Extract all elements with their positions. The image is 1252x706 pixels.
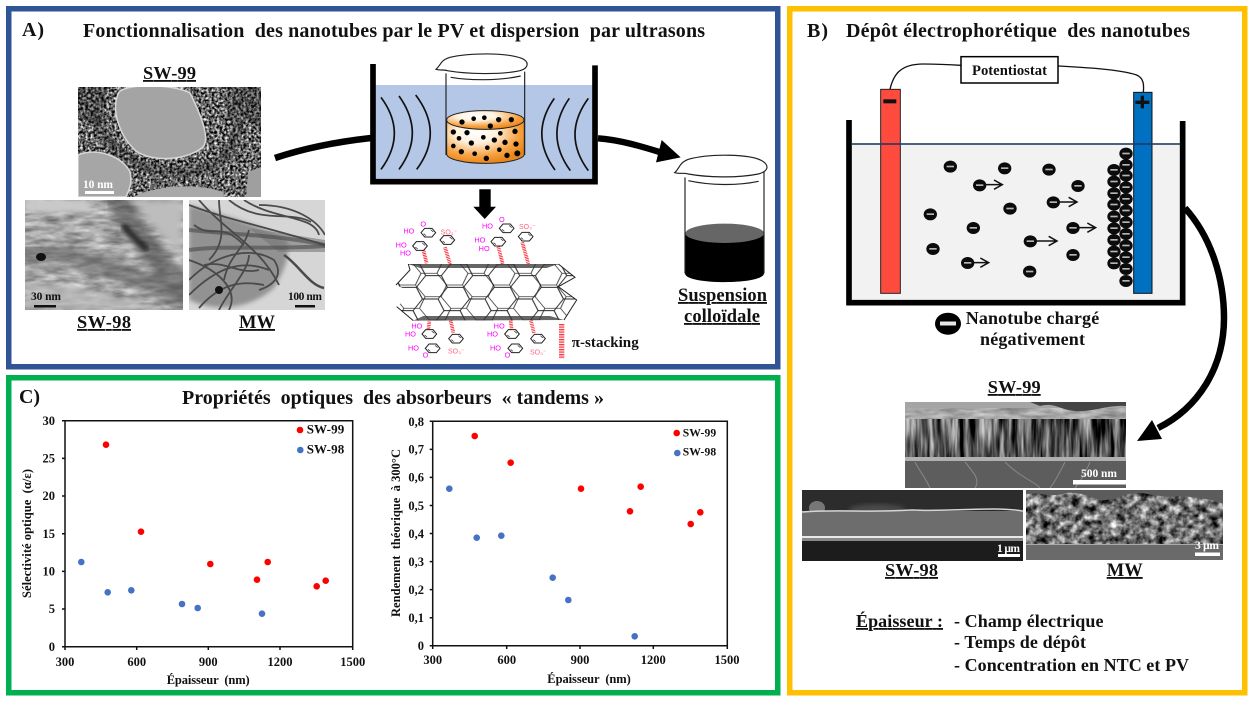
beaker with colloidal suspension — [675, 155, 767, 282]
panel B letter: B) — [807, 20, 828, 42]
anode — [1134, 92, 1152, 293]
cathode — [881, 89, 900, 293]
y axis tick labels: 0 — [418, 639, 424, 653]
legend: SW-98 — [683, 446, 716, 458]
y axis title: Rendement théorique à 300°C — [389, 449, 403, 617]
panel B: dépôt électrophorétique — [790, 9, 1245, 693]
panel B title: Dépôt électrophorétique des nanotubes — [846, 20, 1190, 42]
y axis tick labels — [42, 414, 55, 654]
x axis tick labels — [56, 655, 365, 669]
label suspension colloidale: colloïdale — [684, 307, 760, 327]
label SW-98: SW-98 — [77, 312, 131, 332]
legend: charged nanotube — [935, 308, 1099, 349]
PV molecule bottom left: O — [423, 350, 429, 359]
x axis tick labels: 900 — [199, 655, 218, 669]
y axis tick labels: 0,4 — [408, 527, 425, 541]
label SW-98 SEM: SW-98 — [885, 560, 938, 580]
PV molecule bottom left: SO₃⁻ — [448, 349, 465, 356]
PV molecule bottom right — [487, 322, 547, 359]
y axis tick labels: 0 — [49, 640, 55, 654]
TEM image SW-98 — [25, 200, 183, 310]
thickness parameters: - Champ électrique — [954, 611, 1104, 631]
wires — [890, 64, 1144, 92]
ultrasonic bath with beaker — [373, 54, 595, 182]
y axis tick labels: 20 — [42, 489, 55, 503]
panel C letter: C) — [19, 386, 40, 408]
PV molecule top left: SO₃⁻ — [441, 230, 458, 237]
SW-99 points — [103, 441, 329, 590]
PV molecule bottom right: O — [505, 350, 511, 359]
scale 3 µm: 3 µm — [1195, 540, 1219, 552]
scale 1 µm: 1 µm — [997, 543, 1020, 555]
curved arrow to SEM images — [1137, 208, 1224, 441]
migrating nanotubes with arrows — [961, 179, 1096, 269]
PV molecule bottom left: HO — [411, 322, 423, 331]
x axis title: Épaisseur (nm) — [547, 672, 631, 686]
y axis tick labels: 0,7 — [408, 442, 424, 456]
potentiostat box: Potentiostat — [972, 63, 1047, 79]
legend — [673, 426, 716, 458]
label SW-99 SEM: SW-99 — [988, 377, 1041, 397]
x axis tick labels — [423, 653, 740, 667]
legend: SW-98 — [307, 442, 345, 456]
y axis tick labels: 0,5 — [408, 499, 424, 513]
PV molecule top left: HO — [400, 249, 411, 258]
x axis title: Épaisseur (nm) — [167, 673, 250, 687]
SW-98 points — [446, 485, 638, 640]
electrophoretic cell — [849, 57, 1183, 303]
arrow: down to molecule — [473, 189, 496, 219]
molecular schematic: pi-stacking on nanotube — [396, 215, 577, 359]
scale 30 nm: 30 nm — [31, 291, 61, 303]
x axis tick labels: 1200 — [641, 653, 666, 667]
PV molecule bottom right: HO — [487, 330, 498, 339]
SW-98 points — [78, 559, 265, 617]
PV molecule top left: O — [420, 220, 426, 229]
thickness parameters — [856, 610, 1189, 675]
PV molecule top left — [396, 220, 458, 258]
x axis tick labels: 1500 — [340, 655, 365, 669]
sample with nanotubes — [447, 111, 524, 163]
deposited nanotube layer — [1107, 148, 1133, 287]
SEM image SW-98 — [802, 490, 1023, 561]
label pi-stacking: π-stacking — [572, 335, 639, 351]
y axis tick labels: 0,8 — [408, 415, 424, 429]
panel A letter: A) — [22, 19, 44, 41]
thickness parameters: - Concentration en NTC et PV — [954, 655, 1189, 675]
arrow: images to bath — [275, 138, 371, 158]
PV molecule bottom right: HO — [490, 344, 501, 353]
x axis tick labels: 900 — [571, 653, 589, 667]
label suspension colloidale — [678, 286, 768, 327]
potentiostat box — [961, 57, 1058, 83]
plot frame and ticks — [430, 421, 727, 649]
PV molecule bottom right: HO — [494, 322, 505, 331]
SW-99 points — [471, 433, 704, 527]
free charged nanotubes — [924, 161, 1085, 278]
panel C title: Propriétés optiques des absorbeurs « tandems » — [182, 387, 604, 409]
ultrasonic waves — [381, 95, 588, 171]
solution surface — [852, 141, 1180, 146]
PV molecule top left: HO — [403, 226, 415, 235]
PV molecule bottom left — [405, 322, 465, 359]
panel A title: Fonctionnalisation des nanotubes par le PV et dispersion par ultrasons — [83, 20, 705, 42]
y axis tick labels — [408, 415, 425, 653]
pi-stacking bonds — [423, 242, 562, 358]
scale 500 nm — [1073, 468, 1126, 484]
PV molecule top right: HO — [479, 244, 490, 253]
y axis tick labels: 0,2 — [408, 583, 424, 597]
PV molecule top right: O — [499, 215, 505, 224]
x axis tick labels: 600 — [497, 653, 516, 667]
legend: charged nanotube: Nanotube chargé — [966, 308, 1099, 328]
y axis tick labels: 25 — [42, 452, 55, 466]
y axis tick labels: 0,3 — [408, 555, 424, 569]
PV molecule bottom left: HO — [408, 344, 419, 353]
plot frame and ticks — [62, 421, 353, 650]
PV molecule top left: HO — [396, 240, 407, 249]
y axis tick labels: 5 — [49, 602, 55, 616]
x axis tick labels: 1200 — [268, 655, 292, 669]
SEM image SW-99 — [905, 402, 1126, 488]
x axis tick labels: 1500 — [714, 653, 740, 667]
arrow: bath to suspension — [598, 138, 681, 162]
y axis tick labels: 15 — [42, 527, 55, 541]
scatter chart: rendement théorique — [389, 415, 740, 686]
thickness parameters: Épaisseur : — [856, 610, 943, 631]
PV molecule top right: SO₃⁻ — [519, 224, 536, 231]
scale 10 nm: 10 nm — [83, 179, 113, 191]
PV molecule bottom left: HO — [405, 329, 416, 338]
x axis tick labels: 300 — [423, 653, 442, 667]
PV molecule top right: HO — [474, 236, 486, 245]
y axis tick labels: 0,1 — [408, 611, 424, 625]
label SW-99: SW-99 — [143, 63, 196, 83]
panel C: propriétés optiques — [9, 378, 778, 693]
PV molecule top right — [474, 215, 536, 253]
TEM image MW — [189, 200, 325, 310]
thickness parameters: - Temps de dépôt — [954, 632, 1086, 652]
label MW SEM: MW — [1107, 561, 1143, 581]
legend: SW-99 — [683, 426, 716, 440]
scale 100 nm: 100 nm — [288, 291, 322, 303]
nanotube hexagon mesh — [396, 264, 577, 321]
y axis tick labels: 0,6 — [408, 470, 424, 484]
scale 500 nm: 500 nm — [1081, 468, 1117, 480]
legend: SW-99 — [307, 422, 345, 436]
x axis tick labels: 600 — [127, 655, 146, 669]
y axis tick labels: 10 — [42, 564, 55, 578]
PV molecule bottom right: SO₃⁻ — [530, 349, 547, 356]
y axis title: Sélectivité optique (α/ε) — [20, 469, 34, 598]
legend — [297, 422, 345, 456]
SEM image MW — [1026, 490, 1223, 560]
PV molecule top right: HO — [482, 222, 493, 231]
panel A: fonctionnalisation — [9, 9, 778, 367]
beaker outline — [436, 54, 527, 155]
label MW: MW — [239, 313, 276, 333]
x axis tick labels: 300 — [56, 655, 74, 669]
scatter chart: sélectivité optique — [20, 414, 365, 687]
TEM image SW-99 — [78, 87, 261, 197]
y axis tick labels: 30 — [42, 414, 55, 428]
label suspension colloidale: Suspension — [678, 286, 768, 306]
legend: charged nanotube: négativement — [980, 329, 1085, 349]
